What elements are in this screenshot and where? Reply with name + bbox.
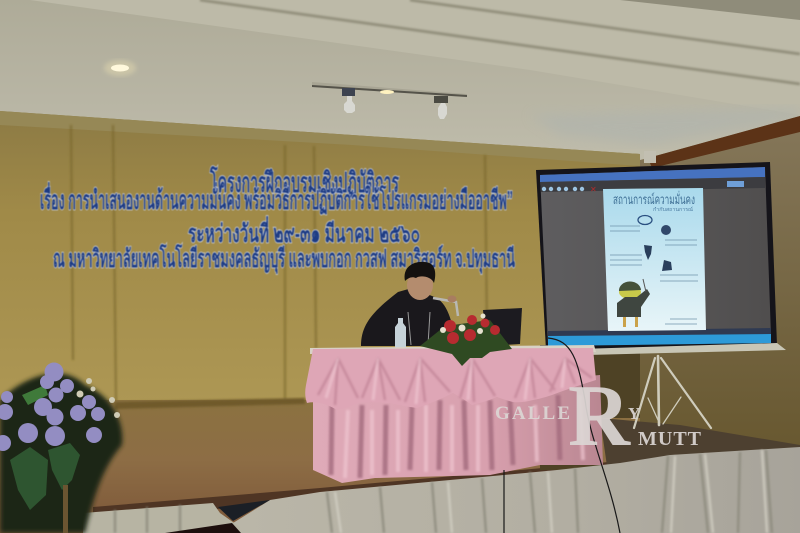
watermark Y: Y [628, 404, 640, 423]
watermark [495, 368, 702, 465]
poster title: สถานการณ์ความมั่นคง [613, 191, 695, 207]
foliage mass [0, 373, 122, 533]
watermark GALLE: GALLE [495, 403, 570, 424]
presenter [361, 262, 522, 350]
foreground dark object [165, 523, 241, 533]
swag valance [305, 348, 596, 410]
purple flower plant [0, 362, 122, 533]
screen image [540, 167, 771, 344]
screen frame [536, 162, 777, 350]
watermark MUTT: MUTT [638, 428, 702, 450]
head [407, 270, 433, 300]
soldier cartoon [617, 279, 650, 327]
close icon: ✕ [590, 185, 597, 194]
white stage skirt [83, 447, 800, 533]
gold curtain backdrop [0, 111, 640, 402]
fern leaves [10, 447, 48, 510]
ceiling track lights [312, 82, 467, 119]
table top [310, 345, 596, 354]
pleated skirt [313, 375, 603, 483]
microphone cable [504, 338, 620, 533]
swag fans [318, 358, 592, 405]
poster text lines [610, 226, 698, 324]
tripod [634, 356, 711, 428]
ceiling downlight [104, 60, 136, 76]
banner text [40, 165, 515, 275]
flower stem [63, 485, 68, 533]
lavender blooms [0, 362, 105, 451]
projection screen [536, 162, 786, 356]
pink table skirt [305, 345, 603, 483]
watermark R: R [568, 368, 631, 465]
water bottle [395, 318, 406, 350]
laptop [483, 308, 522, 346]
flower arrangement [420, 314, 512, 366]
white blooms [76, 378, 120, 418]
poster subtitle: กำกับสถานการณ์ [653, 206, 693, 213]
poster icons [638, 216, 672, 271]
ceiling [0, 0, 800, 165]
poster slide [603, 188, 706, 331]
right wall [640, 116, 800, 450]
hand [448, 296, 456, 302]
microphone [433, 298, 458, 316]
stage floor [0, 345, 800, 533]
body [361, 288, 456, 346]
toolbar icons [542, 187, 584, 191]
banner line 3: ระหว่างวันที่ ๒๙-๓๑ มีนาคม ๒๕๖๐ [188, 216, 420, 248]
banner line 1: โครงการฝึกอบรมเชิงปฏิบัติการ [209, 165, 399, 199]
